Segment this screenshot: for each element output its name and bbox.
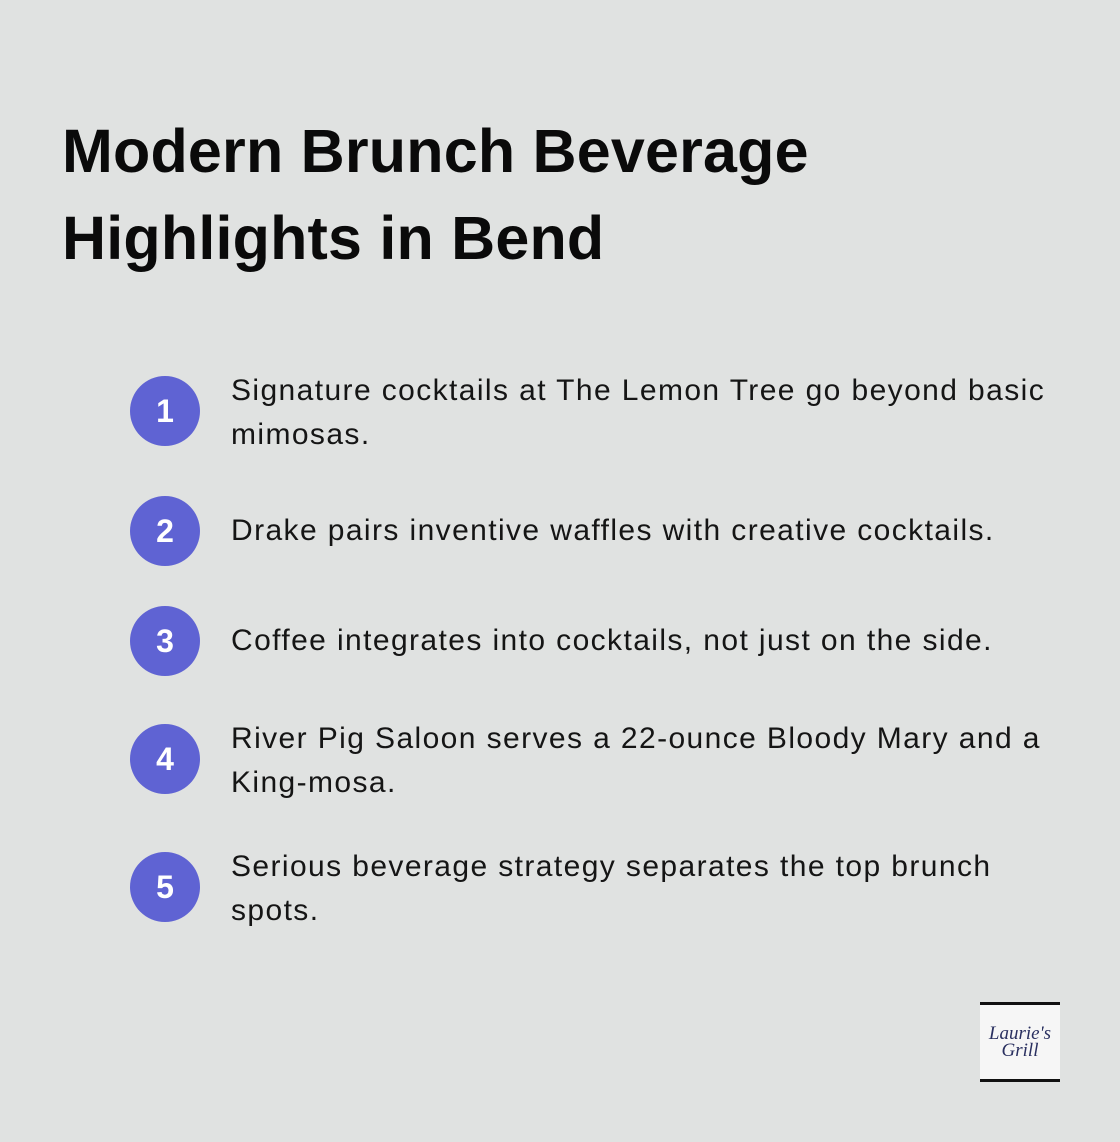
logo: Laurie's (989, 1023, 1051, 1044)
item 3 (130, 606, 993, 676)
logo: Grill (1002, 1040, 1038, 1061)
item 1: 1 (156, 393, 174, 429)
item 5: Serious beverage strategy separates the top brunch (231, 850, 991, 883)
item 5: 5 (156, 869, 174, 905)
item 4: King-mosa. (231, 766, 397, 799)
item 4 (130, 722, 1041, 799)
item 3: Coffee integrates into cocktails, not just on the side. (231, 624, 993, 657)
item 3: 3 (156, 623, 174, 659)
item 2 (130, 496, 995, 566)
item 1 (130, 374, 1045, 451)
item 5 (130, 850, 991, 927)
logo (980, 1002, 1060, 1082)
item 2: Drake pairs inventive waffles with creative cocktails. (231, 514, 995, 547)
item 1: Signature cocktails at The Lemon Tree go beyond basic (231, 374, 1045, 407)
item 4: River Pig Saloon serves a 22-ounce Bloody Mary and a (231, 722, 1041, 755)
title (62, 117, 809, 272)
title: Modern Brunch Beverage (62, 117, 809, 185)
item 2: 2 (156, 513, 174, 549)
item 1: mimosas. (231, 418, 371, 451)
item 5: spots. (231, 894, 319, 927)
title: Highlights in Bend (62, 204, 604, 272)
item 4: 4 (156, 741, 174, 777)
